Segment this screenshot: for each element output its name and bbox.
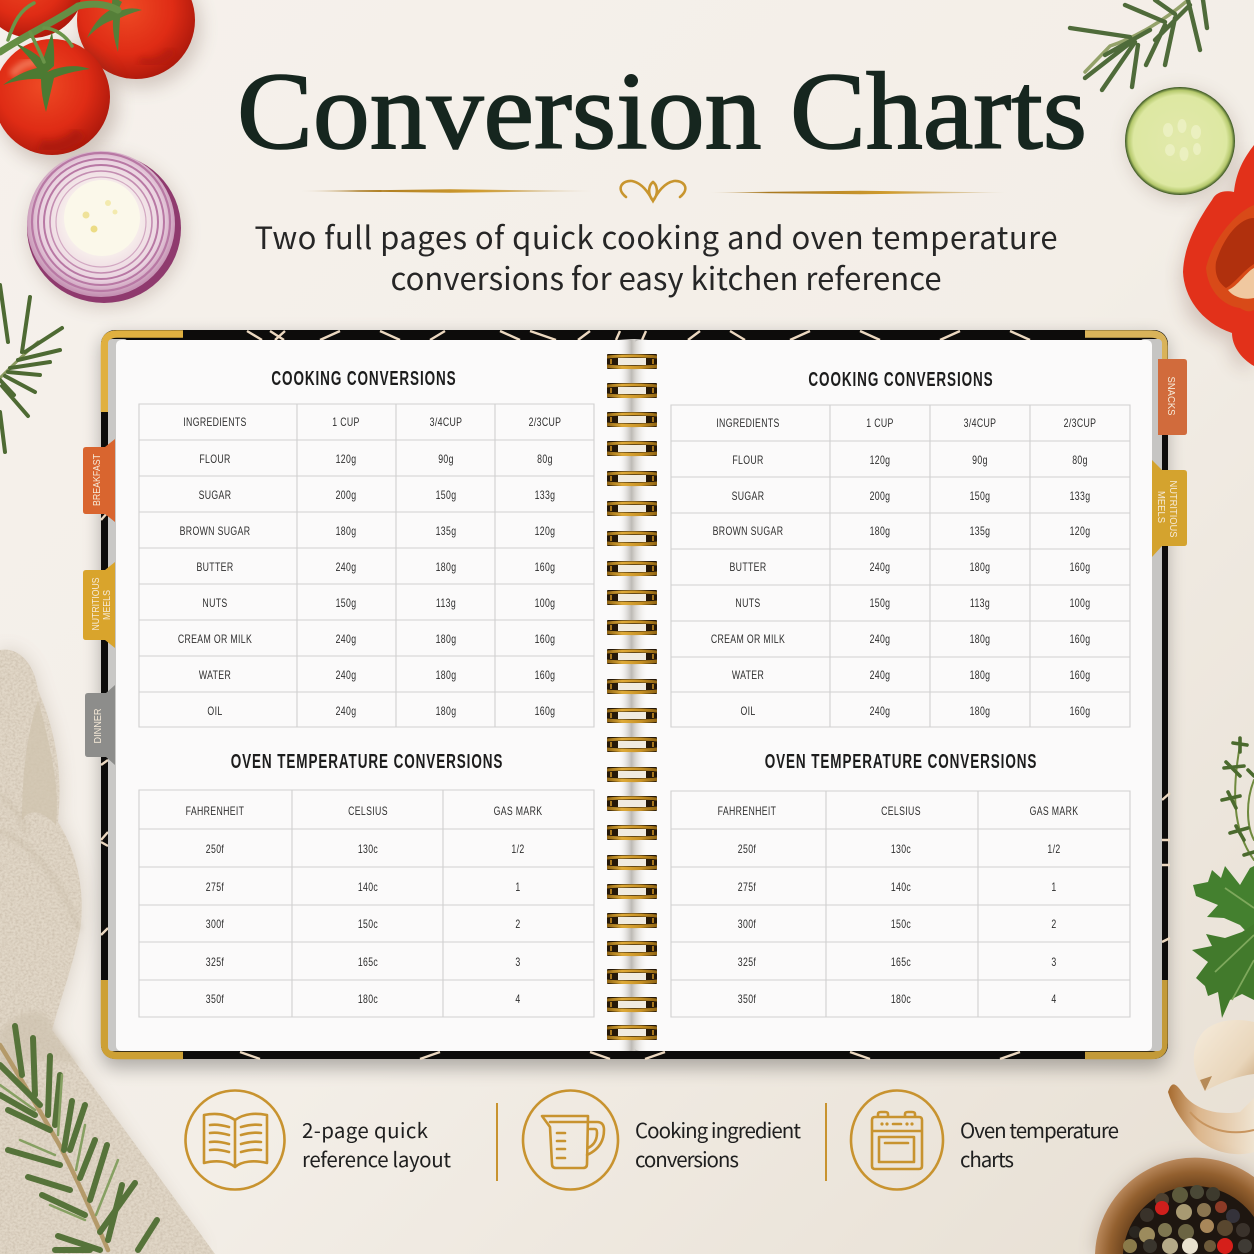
table: right oven temperature: 300f xyxy=(738,919,756,931)
table: right cooking conversions: 200g xyxy=(870,491,890,503)
table: right cooking conversions: 80g xyxy=(1072,455,1088,467)
table: left cooking conversions: OIL xyxy=(207,706,223,718)
label: oven temperature charts: charts xyxy=(960,1143,1014,1173)
table: right oven temperature: 2 xyxy=(1051,919,1057,931)
table: right cooking conversions: 240g xyxy=(870,670,890,682)
table: left oven temperature: 250f xyxy=(206,844,224,856)
table: left oven temperature: 1/2 xyxy=(511,844,525,856)
label: cooking ingredient conversions: Cooking ingredient xyxy=(635,1114,801,1144)
table: left cooking conversions: NUTS xyxy=(202,598,228,610)
table: right cooking conversions: 240g xyxy=(870,562,890,574)
spine gutter shadow xyxy=(618,339,648,1051)
tab: nutritious meals right: NUTRITIOUS xyxy=(1167,480,1179,538)
table: right cooking conversions: 2/3CUP xyxy=(1064,418,1096,430)
table: right oven temperature: 275f xyxy=(738,882,756,894)
table: right cooking conversions: 150g xyxy=(870,598,890,610)
table heading: left oven temperature: OVEN TEMPERATURE CONVERSIONS xyxy=(231,750,503,773)
table: left cooking conversions: 120g xyxy=(336,454,356,466)
table: left cooking conversions: 180g xyxy=(436,670,456,682)
subtitle: Two full pages of quick cooking and oven temperature xyxy=(254,213,1058,258)
table: left cooking conversions: 3/4CUP xyxy=(430,417,462,429)
feature: oven temperature charts xyxy=(851,1090,1119,1190)
table: left cooking conversions: 100g xyxy=(535,598,555,610)
rosemary: bottom left sprig xyxy=(0,1026,157,1250)
onion slice xyxy=(27,151,184,308)
garlic clove: lower xyxy=(1168,1084,1254,1154)
table: right cooking conversions: 133g xyxy=(1070,491,1090,503)
table: right cooking conversions: 1 CUP xyxy=(866,418,894,430)
divider xyxy=(496,1103,498,1181)
bowl of peppercorns xyxy=(1095,1158,1254,1254)
table: left cooking conversions: 135g xyxy=(436,526,456,538)
table: left cooking conversions: 160g xyxy=(535,562,555,574)
table: left cooking conversions: 90g xyxy=(438,454,454,466)
tab: breakfast xyxy=(83,439,115,522)
table: right oven temperature: 250f xyxy=(738,844,756,856)
tomato vine stem xyxy=(0,3,118,62)
towel: linen cloth bottom left xyxy=(0,650,215,1254)
tab: nutritious meals left: MEELS xyxy=(101,590,113,620)
book drop shadow xyxy=(101,336,1167,1068)
table: left oven temperature: 165c xyxy=(358,957,378,969)
label: 2-page quick reference layout: reference layout xyxy=(302,1143,451,1173)
gold corner: top right xyxy=(1085,334,1164,360)
table: right cooking conversions: 240g xyxy=(870,706,890,718)
table: right cooking conversions: BUTTER xyxy=(730,562,766,574)
table: left cooking conversions: 240g xyxy=(336,634,356,646)
table: right cooking conversions: 180g xyxy=(870,526,890,538)
table: left cooking conversions: 180g xyxy=(436,706,456,718)
table: right oven temperature: 180c xyxy=(891,994,911,1006)
table heading: right oven temperature: OVEN TEMPERATURE CONVERSIONS xyxy=(765,750,1037,773)
divider xyxy=(825,1103,827,1181)
table: left cooking conversions: 240g xyxy=(336,670,356,682)
table: right oven temperature: 1 xyxy=(1051,882,1057,894)
table: right cooking conversions: 3/4CUP xyxy=(964,418,996,430)
table: right cooking conversions: BROWN SUGAR xyxy=(713,526,783,538)
table: left cooking conversions: 120g xyxy=(535,526,555,538)
table: right cooking conversions xyxy=(671,405,1130,727)
table: left cooking conversions: INGREDIENTS xyxy=(183,417,247,429)
table: right cooking conversions: 240g xyxy=(870,634,890,646)
table: left cooking conversions: 150g xyxy=(336,598,356,610)
table: right cooking conversions: NUTS xyxy=(735,598,761,610)
tab: breakfast: BREAKFAST xyxy=(91,454,103,506)
table: left cooking conversions: 150g xyxy=(436,490,456,502)
garlic clove: upper xyxy=(1194,1020,1254,1091)
table: right oven temperature: 165c xyxy=(891,957,911,969)
table: left cooking conversions: 160g xyxy=(535,706,555,718)
tab: nutritious meals right: MEELS xyxy=(1155,491,1167,523)
label: cooking ingredient conversions: conversions xyxy=(635,1143,739,1173)
title: Conversion Charts xyxy=(237,50,1087,172)
table: left oven temperature: 325f xyxy=(206,957,224,969)
table: left cooking conversions: 1 CUP xyxy=(332,417,360,429)
table: left oven temperature: 350f xyxy=(206,994,224,1006)
divider ornament xyxy=(298,181,1010,201)
icon: open book xyxy=(186,1090,284,1190)
table: right cooking conversions: 100g xyxy=(1070,598,1090,610)
page edges xyxy=(108,339,128,1051)
gold corner: bottom left xyxy=(104,980,183,1056)
tab: snacks: SNACKS xyxy=(1165,376,1177,416)
table: left oven temperature: 150c xyxy=(358,919,378,931)
table: left cooking conversions: WATER xyxy=(199,670,231,682)
table: right oven temperature: 1/2 xyxy=(1047,844,1061,856)
table: right cooking conversions: FLOUR xyxy=(732,455,764,467)
feature: cooking ingredient conversions xyxy=(523,1090,801,1190)
tab: snacks xyxy=(1158,359,1187,435)
icon: oven xyxy=(851,1090,943,1190)
table: right oven temperature: CELSIUS xyxy=(881,806,921,818)
gold corner: bottom right xyxy=(1085,980,1164,1056)
notebook xyxy=(83,330,1187,1068)
table heading: right cooking conversions: COOKING CONVERSIONS xyxy=(808,368,994,391)
tab: dinner: DINNER xyxy=(92,708,104,744)
table: right cooking conversions: 180g xyxy=(970,562,990,574)
table: left cooking conversions: FLOUR xyxy=(199,454,231,466)
subtitle xyxy=(254,213,1058,299)
table: left cooking conversions: 180g xyxy=(336,526,356,538)
table: right cooking conversions: 135g xyxy=(970,526,990,538)
cucumber slice xyxy=(1125,87,1237,200)
table: right cooking conversions: 90g xyxy=(972,455,988,467)
table: left oven temperature: 140c xyxy=(358,882,378,894)
tab: nutritious meals right xyxy=(1152,460,1187,557)
table: left cooking conversions: 113g xyxy=(436,598,456,610)
table: left oven temperature: CELSIUS xyxy=(348,806,388,818)
tab: dinner xyxy=(85,685,115,765)
rosemary: top right sprig xyxy=(1070,0,1207,90)
table: right cooking conversions: 160g xyxy=(1070,706,1090,718)
label: oven temperature charts: Oven temperature xyxy=(960,1114,1119,1144)
table: right oven temperature: GAS MARK xyxy=(1030,806,1078,818)
table: right cooking conversions: 180g xyxy=(970,670,990,682)
table: right oven temperature: 325f xyxy=(738,957,756,969)
table: left cooking conversions: 240g xyxy=(336,562,356,574)
table: left cooking conversions: 180g xyxy=(436,562,456,574)
table: right cooking conversions: 120g xyxy=(870,455,890,467)
table heading: left cooking conversions: COOKING CONVERSIONS xyxy=(271,367,457,390)
table: left cooking conversions: 133g xyxy=(535,490,555,502)
right page xyxy=(634,340,1152,1051)
table: left cooking conversions: 160g xyxy=(535,634,555,646)
tomato: top right xyxy=(77,0,201,88)
table: left oven temperature: 180c xyxy=(358,994,378,1006)
table: left cooking conversions: 2/3CUP xyxy=(529,417,561,429)
table: right cooking conversions: 120g xyxy=(1070,526,1090,538)
table: left cooking conversions: 200g xyxy=(336,490,356,502)
table: left oven temperature: 4 xyxy=(515,994,521,1006)
table: left cooking conversions: 180g xyxy=(436,634,456,646)
table: right cooking conversions: 160g xyxy=(1070,670,1090,682)
table: right oven temperature: 4 xyxy=(1051,994,1057,1006)
table: right oven temperature: 140c xyxy=(891,882,911,894)
table: left cooking conversions xyxy=(139,404,594,727)
table: left oven temperature: 1 xyxy=(515,882,521,894)
table: right oven temperature: 350f xyxy=(738,994,756,1006)
table: left oven temperature: 2 xyxy=(515,919,521,931)
tomato: back xyxy=(0,0,84,38)
table: left cooking conversions: BUTTER xyxy=(197,562,233,574)
table: left oven temperature: FAHRENHEIT xyxy=(186,806,244,818)
rosemary: left sprig xyxy=(0,285,62,452)
table: right cooking conversions: SUGAR xyxy=(732,491,764,503)
cover with black patterned strip xyxy=(101,330,1168,1059)
label: oven temperature charts xyxy=(960,1114,1119,1173)
table: right cooking conversions: INGREDIENTS xyxy=(716,418,780,430)
table: right oven temperature: 130c xyxy=(891,844,911,856)
spiral binding rings xyxy=(607,354,657,1040)
bell pepper half xyxy=(1179,145,1254,372)
table: right oven temperature: FAHRENHEIT xyxy=(718,806,776,818)
tab: nutritious meals left: NUTRITIOUS xyxy=(90,578,102,630)
label: 2-page quick reference layout xyxy=(302,1114,451,1173)
table: left oven temperature: 300f xyxy=(206,919,224,931)
table: left cooking conversions: 240g xyxy=(336,706,356,718)
table: left oven temperature: GAS MARK xyxy=(494,806,542,818)
table: left oven temperature: 275f xyxy=(206,882,224,894)
table: left cooking conversions: CREAM OR MILK xyxy=(178,634,252,646)
table: left cooking conversions: 160g xyxy=(535,670,555,682)
table: right cooking conversions: 180g xyxy=(970,706,990,718)
tab: nutritious meals left xyxy=(83,562,115,648)
left page xyxy=(116,340,634,1051)
table: right cooking conversions: CREAM OR MILK xyxy=(711,634,785,646)
table: right cooking conversions: WATER xyxy=(732,670,764,682)
tomato: front left xyxy=(0,32,118,165)
thyme sprig xyxy=(1222,738,1254,860)
table: right cooking conversions: 160g xyxy=(1070,562,1090,574)
table: left oven temperature: 3 xyxy=(515,957,521,969)
table: left cooking conversions: 80g xyxy=(537,454,553,466)
table: right oven temperature: 150c xyxy=(891,919,911,931)
table: right cooking conversions: 160g xyxy=(1070,634,1090,646)
table: right oven temperature xyxy=(671,791,1130,1017)
table: right oven temperature: 3 xyxy=(1051,957,1057,969)
label: cooking ingredient conversions xyxy=(635,1114,801,1173)
table: right cooking conversions: 113g xyxy=(970,598,990,610)
table: left oven temperature xyxy=(139,790,594,1017)
feature: 2-page quick reference xyxy=(186,1090,451,1190)
table: left cooking conversions: SUGAR xyxy=(199,490,231,502)
table: left oven temperature: 130c xyxy=(358,844,378,856)
cover pattern accents xyxy=(101,331,1170,1059)
gold corner: top left xyxy=(104,334,183,412)
table: right cooking conversions: 180g xyxy=(970,634,990,646)
table: right cooking conversions: 150g xyxy=(970,491,990,503)
parsley leaves xyxy=(1192,866,1254,1018)
table: left cooking conversions: BROWN SUGAR xyxy=(180,526,250,538)
icon: measuring cup xyxy=(523,1090,618,1190)
subtitle: conversions for easy kitchen reference xyxy=(390,254,942,299)
label: 2-page quick reference layout: 2-page quick xyxy=(302,1114,429,1144)
table: right cooking conversions: OIL xyxy=(740,706,756,718)
